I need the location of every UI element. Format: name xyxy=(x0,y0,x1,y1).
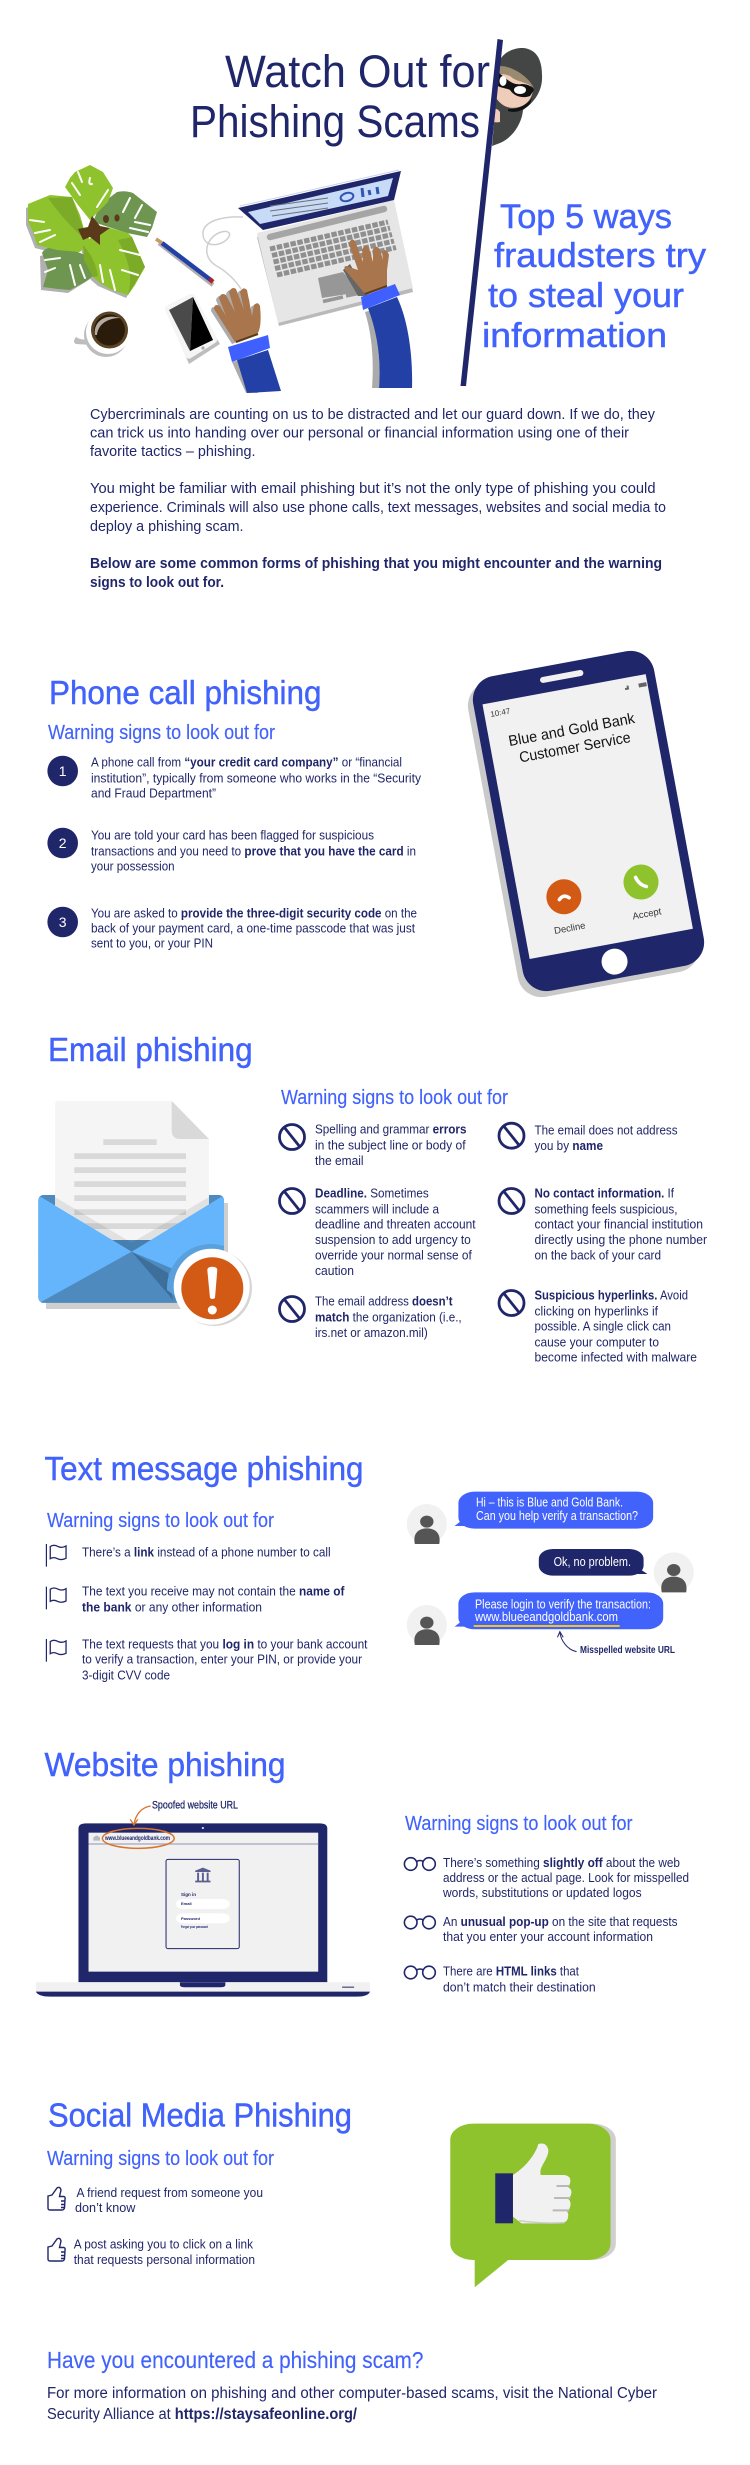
warning: spelling and grammar errors xyxy=(280,1123,467,1168)
chat bubble: reply: Ok, no problem. xyxy=(554,1555,631,1569)
warning: unusual pop-up: that you enter your account information xyxy=(443,1929,653,1944)
illustration: spoofed website on laptop: Password xyxy=(181,1916,200,1921)
heading: have you encountered a scam: Have you encountered a phishing scam? xyxy=(47,2347,423,2373)
subheading: text warning signs: Warning signs to look out for xyxy=(47,1510,274,1532)
list item 1: 1 xyxy=(59,763,67,779)
illustration: spoofed website on laptop: Sign in xyxy=(181,1892,196,1897)
warning: friend request: A friend request from someone you xyxy=(76,2185,263,2200)
illustration: hooded thief behind pole xyxy=(491,48,542,146)
warning: no contact information: directly using the phone number xyxy=(534,1233,707,1247)
warning: no bank name xyxy=(46,1584,345,1615)
warning: HTML links: There are HTML links that xyxy=(443,1964,579,1979)
warning: email address mismatch xyxy=(280,1295,462,1340)
warning: does not address by name xyxy=(499,1123,678,1153)
illustration: smartphone with incoming call: 10:47 xyxy=(490,706,511,719)
warning: suspicious hyperlinks xyxy=(499,1289,697,1365)
heading: text message phishing: Text message phishing xyxy=(44,1450,364,1487)
warning: suspicious hyperlinks: cause your computer to xyxy=(534,1336,659,1350)
list item 2: 2 xyxy=(59,835,67,851)
icon: pencil xyxy=(156,239,213,285)
callout: spoofed website URL: Spoofed website URL xyxy=(152,1800,238,1812)
chat bubble: phishing link: www.blueeandgoldbank.com xyxy=(474,1610,618,1624)
title: Watch Out for xyxy=(225,46,490,97)
warning: email address mismatch: irs.net or amazon.mil) xyxy=(315,1326,428,1340)
illustration: smartphone with incoming call: Blue and Gold Bank xyxy=(507,710,637,750)
callout: misspelled website URL: Misspelled website URL xyxy=(580,1645,675,1656)
heading: phone call phishing: Phone call phishing xyxy=(49,674,322,711)
warning: spelling and grammar errors: in the subject line or body of xyxy=(315,1139,466,1153)
heading: social media phishing: Social Media Phishing xyxy=(48,2097,352,2134)
heading: website phishing: Website phishing xyxy=(44,1746,286,1783)
chat bubble: bank greeting: Hi – this is Blue and Gold Bank. xyxy=(476,1496,623,1510)
warning: post with link: A post asking you to click on a link xyxy=(74,2237,253,2252)
warning: no contact information: No contact information. If xyxy=(534,1187,674,1201)
title xyxy=(190,46,490,147)
warning: suspicious hyperlinks: Suspicious hyperlinks. Avoid xyxy=(534,1289,688,1303)
text block: introduction: You might be familiar with email phishing but it’s not the only type of phishing you could xyxy=(90,481,656,497)
warning: no bank name: the bank or any other information xyxy=(82,1600,262,1615)
warning: unusual pop-up xyxy=(404,1914,678,1944)
warning: slightly off page: address or the actual page. Look for misspelled xyxy=(443,1870,689,1885)
list item 1: and Fraud Department” xyxy=(91,786,216,800)
title: Phishing Scams xyxy=(190,96,480,147)
subtitle: fraudsters try xyxy=(494,237,706,275)
chat bubble: phishing link: Please login to verify the transaction: xyxy=(475,1598,651,1612)
chat bubble: bank greeting xyxy=(407,1492,653,1544)
warning: deadline xyxy=(280,1187,476,1278)
text block: introduction: can trick us into handing over our personal or financial information using one of their xyxy=(90,426,629,442)
text block: more information xyxy=(47,2385,657,2423)
warning: does not address by name: you by name xyxy=(534,1139,603,1153)
subtitle: Top 5 ways xyxy=(500,198,672,236)
warning: no contact information: something feels suspicious, xyxy=(534,1203,678,1217)
warning: no bank name: The text you receive may not contain the name of xyxy=(82,1584,345,1599)
warning: unusual pop-up: An unusual pop-up on the site that requests xyxy=(443,1914,678,1929)
text block: more information: Security Alliance at https://staysafeonline.org/ xyxy=(47,2406,358,2423)
illustration: spoofed website on laptop: Forgot your password xyxy=(181,1925,208,1929)
warning: deadline: scammers will include a xyxy=(315,1203,439,1217)
heading: email phishing: Email phishing xyxy=(48,1031,253,1068)
warning: suspicious hyperlinks: clicking on hyperlinks if xyxy=(534,1305,658,1319)
callout: misspelled website URL xyxy=(557,1632,675,1656)
list item 2: You are told your card has been flagged for suspicious xyxy=(91,829,374,843)
subtitle: information xyxy=(482,317,667,355)
warning: does not address by name: The email does not address xyxy=(534,1124,678,1138)
warning: post with link: that requests personal information xyxy=(74,2252,255,2267)
text block: introduction: experience. Criminals will also use phone calls, text messages, websites and social media to xyxy=(90,500,666,516)
illustration: smartphone with incoming call: Customer Service xyxy=(518,729,632,766)
text block: introduction: favorite tactics – phishing. xyxy=(90,444,256,460)
warning: HTML links xyxy=(404,1964,596,1995)
subheading: phone warning signs: Warning signs to look out for xyxy=(48,722,275,744)
warning: link instead of number: There’s a link instead of a phone number to call xyxy=(82,1545,331,1560)
subheading: email warning signs: Warning signs to look out for xyxy=(281,1087,508,1109)
illustration: smartphone with incoming call: Decline xyxy=(553,920,586,937)
list item 3 xyxy=(47,906,417,951)
warning: suspicious hyperlinks: become infected with malware xyxy=(534,1351,697,1365)
warning: email address mismatch: The email address doesn’t xyxy=(315,1295,453,1309)
list item 2: transactions and you need to prove that you have the card in xyxy=(91,844,416,858)
warning: deadline: Deadline. Sometimes xyxy=(315,1187,429,1201)
warning: log in request xyxy=(46,1637,368,1683)
warning: log in request: The text requests that you log in to your bank account xyxy=(82,1637,368,1652)
icon: smartphone xyxy=(165,294,220,364)
warning: slightly off page: There’s something slightly off about the web xyxy=(443,1855,680,1870)
warning: slightly off page: words, substitutions or updated logos xyxy=(442,1885,642,1900)
subheading: website warning signs: Warning signs to look out for xyxy=(405,1813,633,1835)
list item 2 xyxy=(47,828,416,874)
text block: introduction: Below are some common forms of phishing that you might encounter and the warning xyxy=(90,556,662,572)
warning: friend request xyxy=(48,2185,263,2215)
illustration: smartphone with incoming call xyxy=(463,647,709,1001)
warning: no contact information: on the back of your card xyxy=(534,1249,661,1263)
chart: text conversation xyxy=(407,1492,694,1656)
chat bubble: bank greeting: Can you help verify a transaction? xyxy=(476,1509,638,1523)
text block: introduction: signs to look out for. xyxy=(90,575,224,591)
chat bubble: reply xyxy=(539,1549,694,1592)
warning: link instead of number xyxy=(46,1544,331,1567)
warning: no contact information xyxy=(499,1187,707,1263)
illustration: spoofed website on laptop: Email xyxy=(181,1901,192,1906)
warning: deadline: override your normal sense of xyxy=(315,1249,472,1263)
illustration: envelope with warning badge xyxy=(38,1101,252,1326)
text block: more information: For more information on phishing and other computer-based scams, visit the National Cyber xyxy=(47,2385,657,2402)
warning: log in request: 3-digit CVV code xyxy=(82,1668,170,1683)
list item 2: your possession xyxy=(91,860,175,874)
warning: slightly off page xyxy=(404,1855,689,1900)
subtitle: to steal your xyxy=(488,277,684,315)
warning: spelling and grammar errors: the email xyxy=(315,1154,364,1168)
subtitle xyxy=(482,198,706,355)
list item 3: 3 xyxy=(59,914,67,930)
list item 3: back of your payment card, a one-time passcode that was just xyxy=(91,922,415,936)
text block: introduction: deploy a phishing scam. xyxy=(90,519,244,535)
subheading: social warning signs: Warning signs to look out for xyxy=(47,2148,274,2170)
list item 1: institution”, typically from someone who works in the “Security xyxy=(91,771,422,785)
warning: HTML links: don’t match their destination xyxy=(443,1980,596,1995)
text block: introduction xyxy=(90,407,666,591)
illustration: smartphone with incoming call: Accept xyxy=(632,906,663,922)
illustration: monstera plant xyxy=(26,165,157,298)
warning: spelling and grammar errors: Spelling and grammar errors xyxy=(315,1123,467,1137)
warning: deadline: deadline and threaten account xyxy=(315,1218,476,1232)
chat bubble: phishing link xyxy=(407,1592,663,1645)
warning: deadline: caution xyxy=(315,1264,354,1278)
warning: post with link xyxy=(48,2237,255,2267)
warning: no contact information: contact your financial institution xyxy=(534,1218,703,1232)
text block: introduction: Cybercriminals are counting on us to be distracted and let our guard down. If we do, they xyxy=(90,407,656,423)
warning: log in request: to verify a transaction, enter your PIN, or provide your xyxy=(82,1652,363,1667)
list item 3: sent to you, or your PIN xyxy=(91,937,213,951)
illustration: thumbs up speech bubble xyxy=(450,2124,616,2287)
list item 3: You are asked to provide the three-digit security code on the xyxy=(91,906,417,920)
warning: email address mismatch: match the organization (i.e., xyxy=(315,1311,462,1325)
illustration: laptop and hands xyxy=(203,170,413,393)
illustration: spoofed website on laptop xyxy=(36,1800,370,1997)
list item 1 xyxy=(47,756,422,800)
warning: friend request: don’t know xyxy=(75,2200,136,2215)
pole xyxy=(460,39,503,386)
warning: suspicious hyperlinks: possible. A single click can xyxy=(534,1320,671,1334)
warning: deadline: suspension to add urgency to xyxy=(315,1233,471,1247)
list item 1: A phone call from “your credit card company” or “financial xyxy=(91,756,402,770)
icon: coffee cup xyxy=(74,310,130,357)
illustration: spoofed website on laptop: www.blueeandgoldbank.com xyxy=(104,1835,170,1842)
